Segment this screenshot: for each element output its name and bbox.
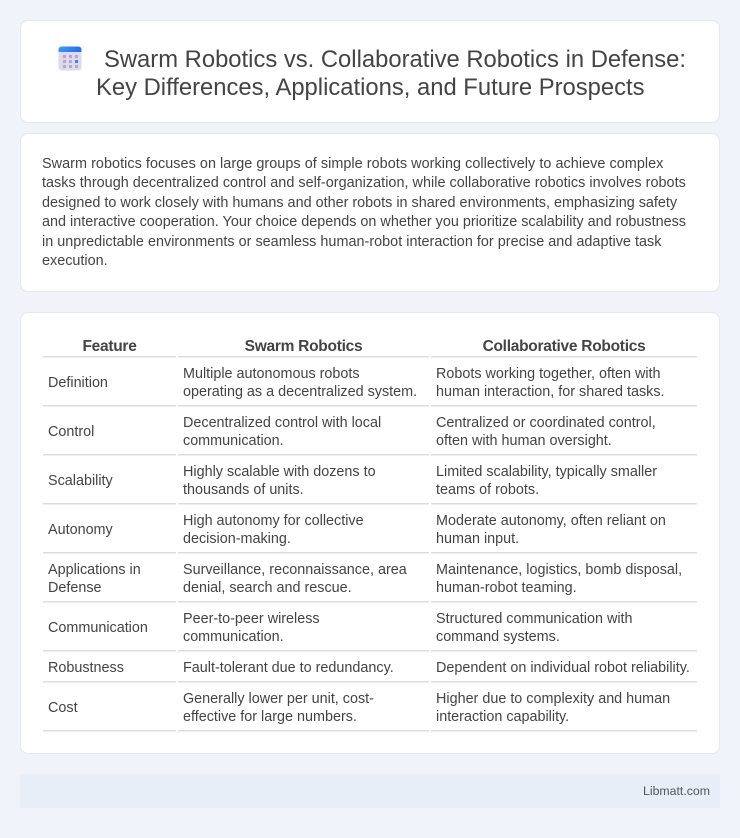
table header — [82, 338, 646, 355]
row: definition — [48, 366, 665, 400]
row: cost: interaction capability. — [436, 709, 569, 725]
row: definition: operating as a decentralized system. — [183, 384, 417, 400]
row: applications in defense: Maintenance, logistics, bomb disposal, — [436, 562, 682, 578]
row: autonomy: Autonomy — [48, 522, 113, 538]
text: designed to work closely with humans and other robots in shared environments, emphasizing safety — [42, 195, 677, 211]
footer bar — [20, 774, 720, 808]
row: cost: Generally lower per unit, cost- — [183, 691, 374, 707]
row: cost: effective for large numbers. — [183, 709, 357, 725]
row: autonomy: human input. — [436, 531, 519, 547]
row: communication: command systems. — [436, 629, 560, 645]
panel: title — [20, 20, 720, 123]
row: scalability: Highly scalable with dozens to — [183, 464, 376, 480]
row: control: Centralized or coordinated control, — [436, 415, 656, 431]
row: robustness: Fault-tolerant due to redundancy. — [183, 660, 394, 676]
row: applications in defense: Defense — [48, 580, 102, 596]
row: definition: Multiple autonomous robots — [183, 366, 360, 382]
text: execution. — [42, 253, 108, 269]
row: communication: Communication — [48, 620, 148, 636]
row: scalability: teams of robots. — [436, 482, 539, 498]
row: robustness: Dependent on individual robot reliability. — [436, 660, 690, 676]
row: applications in defense: denial, search and rescue. — [183, 580, 352, 596]
row: robustness: Robustness — [48, 660, 124, 676]
row: scalability: Limited scalability, typically smaller — [436, 464, 657, 480]
row: autonomy: decision-making. — [183, 531, 291, 547]
row: robustness — [48, 660, 690, 676]
row: applications in defense: human-robot teaming. — [436, 580, 577, 596]
row: scalability: Scalability — [48, 473, 113, 489]
row: control: often with human oversight. — [436, 433, 612, 449]
text: in unpredictable environments or seamless human-robot interaction for precise and adaptive task — [42, 234, 661, 250]
text: Swarm Robotics vs. Collaborative Robotics in Defense: — [104, 46, 686, 73]
row: autonomy — [48, 513, 666, 547]
row: autonomy: Moderate autonomy, often reliant on — [436, 513, 666, 529]
text: and interactive cooperation. Your choice depends on whether you prioritize scalability and robustness — [42, 214, 686, 230]
row: control: Control — [48, 424, 94, 440]
text block: introduction — [42, 156, 686, 269]
row: cost — [48, 691, 670, 725]
panel: introduction — [20, 133, 720, 292]
row: scalability: thousands of units. — [183, 482, 304, 498]
row: control: communication. — [183, 433, 284, 449]
row: definition: Definition — [48, 375, 108, 391]
row: communication: Peer-to-peer wireless — [183, 611, 320, 627]
panel: comparison table — [20, 312, 720, 754]
row: applications in defense: Surveillance, reconnaissance, area — [183, 562, 407, 578]
footer text: Libmatt.com — [643, 784, 710, 798]
table header: Collaborative Robotics — [483, 338, 645, 355]
icon: calendar — [58, 46, 82, 70]
row: cost: Higher due to complexity and human — [436, 691, 670, 707]
row: definition: human interaction, for shared tasks. — [436, 384, 665, 400]
row: communication: communication. — [183, 629, 284, 645]
row: autonomy: High autonomy for collective — [183, 513, 364, 529]
row: control: Decentralized control with local — [183, 415, 381, 431]
row: applications in defense: Applications in — [48, 562, 141, 578]
text: Swarm robotics focuses on large groups of simple robots working collectively to achieve complex — [42, 156, 663, 172]
table header: Swarm Robotics — [245, 338, 362, 355]
row: communication — [48, 611, 633, 645]
text: tasks through decentralized control and self-organization, while collaborative robotics involves robots — [42, 175, 686, 191]
row: control — [48, 415, 656, 449]
table header: Feature — [82, 338, 137, 355]
row: scalability — [48, 464, 657, 498]
row: definition: Robots working together, often with — [436, 366, 661, 382]
heading — [96, 46, 686, 101]
row: applications in defense — [48, 562, 682, 596]
text: Key Differences, Applications, and Future Prospects — [96, 74, 645, 101]
row: cost: Cost — [48, 700, 78, 716]
row: communication: Structured communication with — [436, 611, 633, 627]
comparison table — [43, 338, 697, 732]
